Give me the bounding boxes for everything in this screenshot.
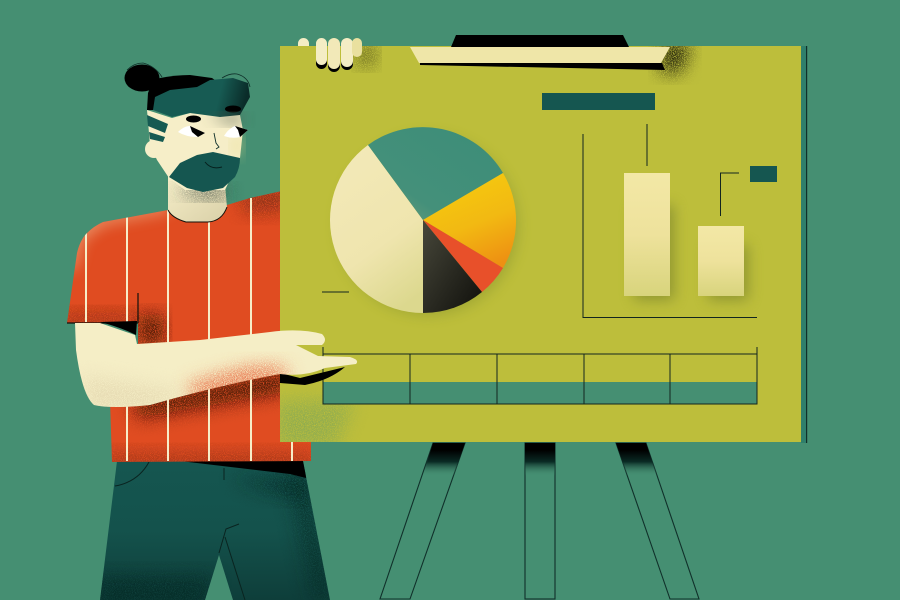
head <box>124 63 250 192</box>
board <box>275 40 807 450</box>
hand fingers on top <box>316 38 362 72</box>
pie leader line <box>322 291 349 293</box>
left eye <box>178 126 205 137</box>
easel legs <box>380 443 699 599</box>
eyebrow <box>186 116 201 122</box>
ear <box>145 140 163 158</box>
pie slice: black <box>423 220 482 313</box>
nose <box>214 133 219 149</box>
forehead shadow <box>208 115 242 124</box>
beard <box>169 152 240 192</box>
panel heading bar <box>542 93 655 110</box>
face <box>147 110 243 190</box>
neck shadow <box>180 186 226 198</box>
pie slice: yellow <box>423 173 516 268</box>
smile <box>205 162 222 168</box>
data table <box>323 347 757 404</box>
arm and hand <box>75 321 357 412</box>
face side tint <box>232 135 242 156</box>
hair <box>147 74 250 117</box>
hair bun <box>124 63 162 92</box>
pie slice: teal <box>368 127 503 220</box>
pants <box>95 460 335 600</box>
pie slice: cream <box>330 145 423 313</box>
hair stripes <box>147 115 168 142</box>
legend tag <box>750 166 777 182</box>
sleeve shadow <box>100 321 137 335</box>
hand far finger behind board <box>298 38 309 56</box>
collar line <box>168 207 227 222</box>
right eye <box>224 126 248 138</box>
pie chart <box>330 127 518 315</box>
bar 1 <box>624 124 674 300</box>
shirt <box>67 192 311 462</box>
neck <box>168 176 227 222</box>
pie slice: orange <box>423 220 503 292</box>
bar chart <box>583 124 777 318</box>
bar 2 <box>698 173 748 300</box>
board clip <box>410 35 670 70</box>
